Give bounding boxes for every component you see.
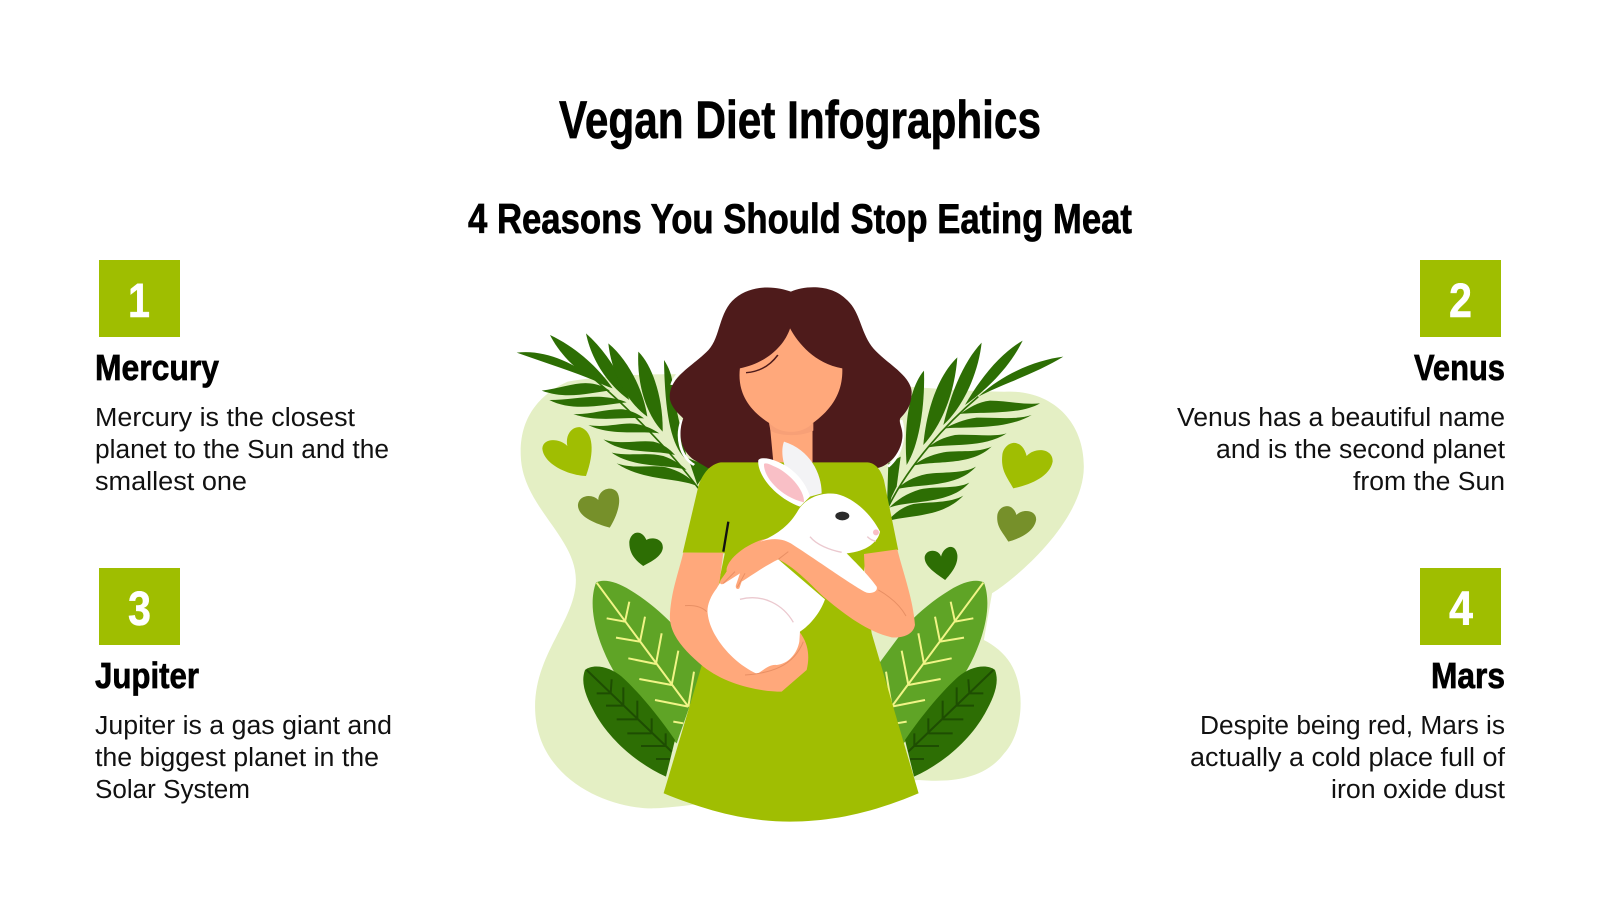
rabbit head and front paw (760, 493, 880, 593)
text block: Mercury description: Mercury is the closest (95, 404, 355, 432)
rabbit eye (835, 512, 849, 520)
subtitle: 4 Reasons You Should Stop Eating Meat (468, 195, 1132, 242)
text block: Jupiter description: Solar System (95, 776, 250, 804)
text block: Mars description (1190, 712, 1506, 804)
rabbit mouth and chin lines (810, 537, 876, 552)
text block: Jupiter description: Jupiter is a gas giant and (95, 712, 392, 740)
number badge 2 (1420, 260, 1501, 337)
dress (664, 462, 919, 822)
rabbit head, ears and paw (758, 442, 880, 593)
rabbit body (707, 559, 825, 675)
right green leaf (877, 581, 987, 743)
icon: olive heart left (578, 489, 619, 528)
heading: Mercury: Mercury (95, 347, 219, 388)
icon: lime heart left (542, 427, 592, 476)
number badge 3: 3 (128, 583, 151, 636)
right arm and hand (720, 538, 915, 637)
heading: Mars: Mars (1431, 655, 1505, 696)
icon: lime heart right (1002, 443, 1053, 488)
heading: Jupiter: Jupiter (95, 655, 199, 696)
text block: Jupiter description: the biggest planet in the (95, 744, 379, 772)
rabbit inner ear (764, 463, 804, 502)
panel: reason 4 Mars (1190, 568, 1506, 804)
text block: Venus description: Venus has a beautiful name (1177, 404, 1505, 432)
rabbit back ear (782, 442, 822, 497)
left arm and hand (670, 553, 808, 692)
number badge 1: 1 (128, 275, 150, 328)
left palm leaf (517, 333, 710, 488)
number badge 2: 2 (1449, 275, 1472, 328)
icon: olive heart right (997, 506, 1036, 542)
text block: Mercury description: planet to the Sun and the (95, 436, 389, 464)
face and neck (740, 328, 842, 467)
text block: Mars description: actually a cold place full of (1190, 744, 1506, 772)
left dark leaf (583, 667, 675, 777)
text block: Mercury description: smallest one (95, 468, 247, 496)
panel: reason 3 Jupiter (95, 568, 392, 804)
text block: Venus description: and is the second planet (1216, 436, 1505, 464)
number badge 3 (99, 568, 180, 645)
illustration: woman holding a rabbit (517, 287, 1084, 822)
number badge 4 (1420, 568, 1501, 645)
rabbit nose (873, 529, 879, 535)
title: Vegan Diet Infographics (559, 91, 1041, 150)
panel: reason 2 Venus (1177, 260, 1505, 496)
sleeve seam (723, 522, 728, 552)
right dark leaf (905, 667, 997, 777)
text block: Jupiter description (95, 712, 392, 804)
icon: dark heart right (925, 547, 957, 580)
text block: Mars description: Despite being red, Mars is (1200, 712, 1505, 740)
hair (670, 287, 912, 468)
text block: Mars description: iron oxide dust (1331, 776, 1505, 804)
icon: dark heart left (629, 533, 663, 566)
right palm leaf (887, 341, 1063, 520)
number badge 1 (99, 260, 180, 337)
hair strand (746, 355, 778, 373)
rabbit front ear (758, 458, 810, 507)
background blob (521, 374, 1084, 808)
left green leaf (593, 581, 703, 743)
text block: Mercury description (95, 404, 389, 496)
number badge 4: 4 (1449, 583, 1473, 636)
heading: Venus: Venus (1414, 347, 1505, 388)
panel: reason 1 Mercury (95, 260, 389, 496)
text block: Venus description (1177, 404, 1505, 496)
text block: Venus description: from the Sun (1353, 468, 1505, 496)
